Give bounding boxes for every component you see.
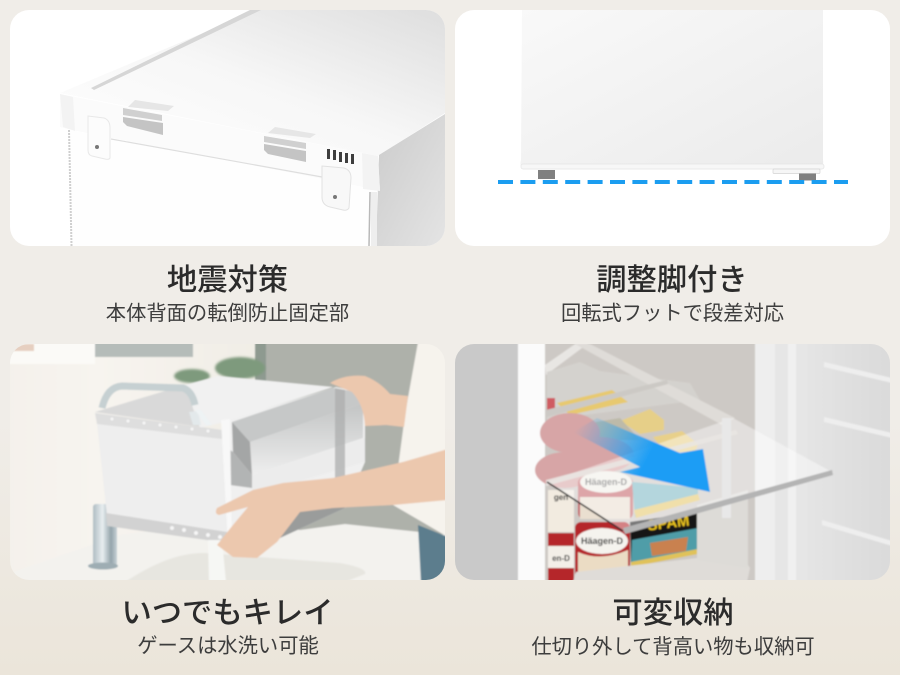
fridge side — [453, 342, 521, 582]
lower hand and arm — [216, 449, 448, 558]
side rail — [575, 344, 735, 425]
heading: earthquake: 地震対策 — [167, 263, 288, 297]
shelf middle bar — [546, 430, 738, 486]
t-shirt — [393, 342, 448, 537]
rim corner blocks — [74, 130, 379, 191]
interior corner light — [545, 342, 590, 375]
shelf front bar — [623, 470, 833, 534]
top rim band — [378, 168, 380, 188]
countertop — [262, 523, 445, 580]
fridge right side — [376, 114, 445, 246]
drawer transparent side — [230, 387, 365, 543]
lower ice cream cup: Häagen-D — [581, 536, 624, 546]
rim shadow line — [111, 139, 322, 177]
left bracket — [88, 116, 110, 159]
shelf post — [722, 418, 731, 518]
left vent — [123, 100, 174, 135]
upper basket — [547, 362, 700, 420]
blue arrow — [573, 418, 710, 492]
heading: always clean: いつでもキレイ — [121, 597, 334, 630]
heading: storage: 可変収納 — [612, 596, 734, 630]
sink — [125, 553, 365, 582]
shelf glass — [547, 418, 832, 532]
right vent — [264, 127, 316, 162]
drawer top rim — [95, 413, 222, 439]
lower ice cream cup — [575, 522, 630, 578]
drawer bottom rim — [106, 513, 228, 543]
upper hand and arm — [330, 376, 408, 427]
dark back wall — [266, 342, 448, 542]
right foot — [799, 174, 816, 180]
left ice cream cups: gen — [554, 493, 568, 502]
subheading: storage: 仕切り外して背高い物も収納可 — [531, 636, 815, 658]
jeans — [418, 524, 445, 580]
panel: earthquake brackets photo — [10, 10, 445, 246]
mirror strip — [95, 342, 193, 357]
panel: washing the gate photo — [8, 342, 448, 582]
panel: adjustable storage photo — [453, 342, 892, 582]
subheading: earthquake: 本体背面の転倒防止固定部 — [106, 302, 349, 325]
subheading: always clean: ゲースは水洗い可能 — [137, 634, 319, 658]
heading: feet: 調整脚付き — [596, 263, 748, 297]
yellow packages — [557, 390, 698, 452]
wall — [8, 342, 266, 582]
fridge top surface — [166, 10, 445, 140]
red tub edge — [547, 398, 555, 410]
spam can — [630, 512, 698, 567]
drawer interior — [95, 376, 333, 430]
fridge back panel — [68, 130, 377, 246]
fridge bottom rim — [521, 164, 824, 169]
door — [807, 342, 892, 582]
pink tubs — [535, 413, 634, 488]
panel: adjustable feet photo — [455, 10, 890, 246]
spam can: SPAM — [646, 513, 690, 535]
fridge body — [520, 10, 823, 169]
plant — [174, 357, 265, 383]
dashed level line — [498, 180, 848, 184]
shelf rear bar — [546, 380, 668, 417]
running water — [195, 410, 212, 425]
left foot — [538, 170, 555, 179]
right frame — [755, 342, 807, 582]
drawer corner post — [222, 420, 232, 530]
right bracket — [773, 169, 820, 174]
shelf side wall — [697, 490, 748, 568]
shelf black edge — [547, 482, 623, 531]
right bracket — [322, 166, 351, 210]
top slot — [91, 10, 261, 90]
door frame — [518, 342, 547, 582]
left ice cream cups — [548, 490, 574, 582]
drawer front face — [98, 426, 118, 515]
faucet — [88, 386, 201, 570]
air slits — [327, 149, 354, 164]
upper ice cream cup: Häagen-D — [585, 477, 628, 487]
left ice cream cups: en-D — [552, 554, 570, 563]
lower shelf — [573, 553, 750, 582]
subheading: feet: 回転式フットで段差対応 — [561, 302, 784, 325]
upper spam can — [632, 482, 700, 518]
interior back — [545, 342, 757, 582]
upper ice cream cup — [578, 471, 633, 519]
